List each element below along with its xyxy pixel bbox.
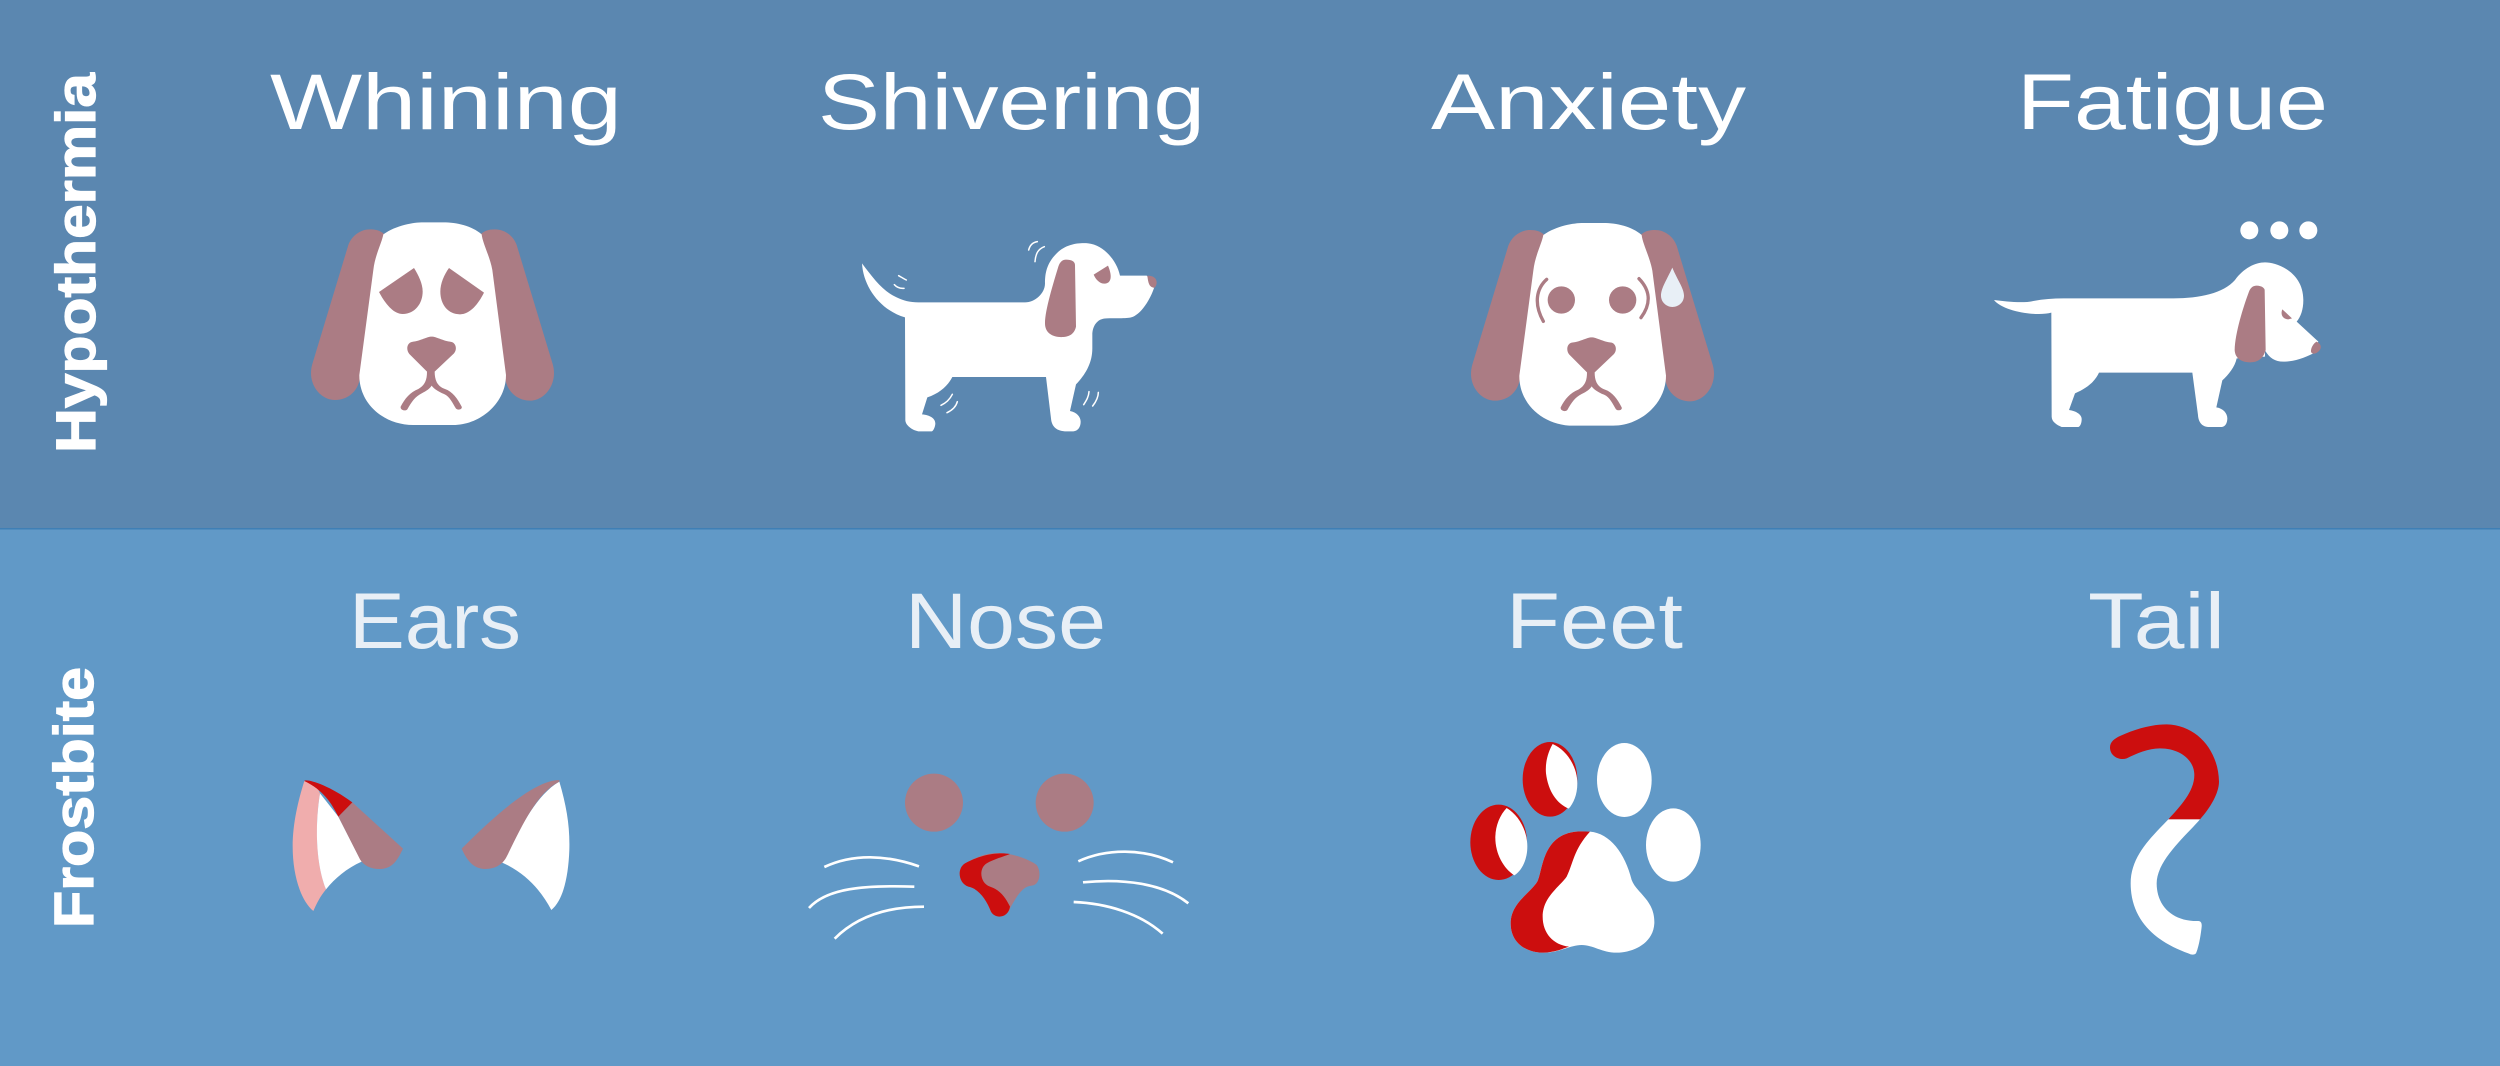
- icon: dog nose, eyes and whiskers: [809, 774, 1188, 939]
- heading: Anxiety: Anxiety: [1431, 57, 1747, 146]
- icon: cat ears with frostbite: [293, 780, 569, 911]
- side heading: Hypothermia: Hypothermia: [44, 72, 107, 453]
- heading: Tail: Tail: [2088, 576, 2225, 665]
- heading: Fatigue: Fatigue: [2017, 57, 2328, 146]
- heading: Nose: Nose: [905, 576, 1106, 665]
- heading: Shivering: Shivering: [818, 57, 1205, 146]
- icon: shivering dog: [862, 242, 1157, 431]
- icon: fatigued dog: [1994, 221, 2321, 427]
- icon: paw print with frostbite: [1470, 742, 1701, 953]
- icon: tail with frostbite: [2110, 724, 2219, 955]
- heading: Feet: Feet: [1506, 576, 1683, 665]
- heading: Ears: Ears: [349, 576, 521, 665]
- side heading: Frostbite: Frostbite: [42, 667, 105, 928]
- heading: Whining: Whining: [270, 57, 622, 146]
- panel: hypothermia: [0, 0, 2500, 528]
- panel: frostbite: [0, 528, 2500, 1066]
- icon: anxious dog face: [1471, 223, 1714, 426]
- icon: whining dog face: [311, 222, 554, 425]
